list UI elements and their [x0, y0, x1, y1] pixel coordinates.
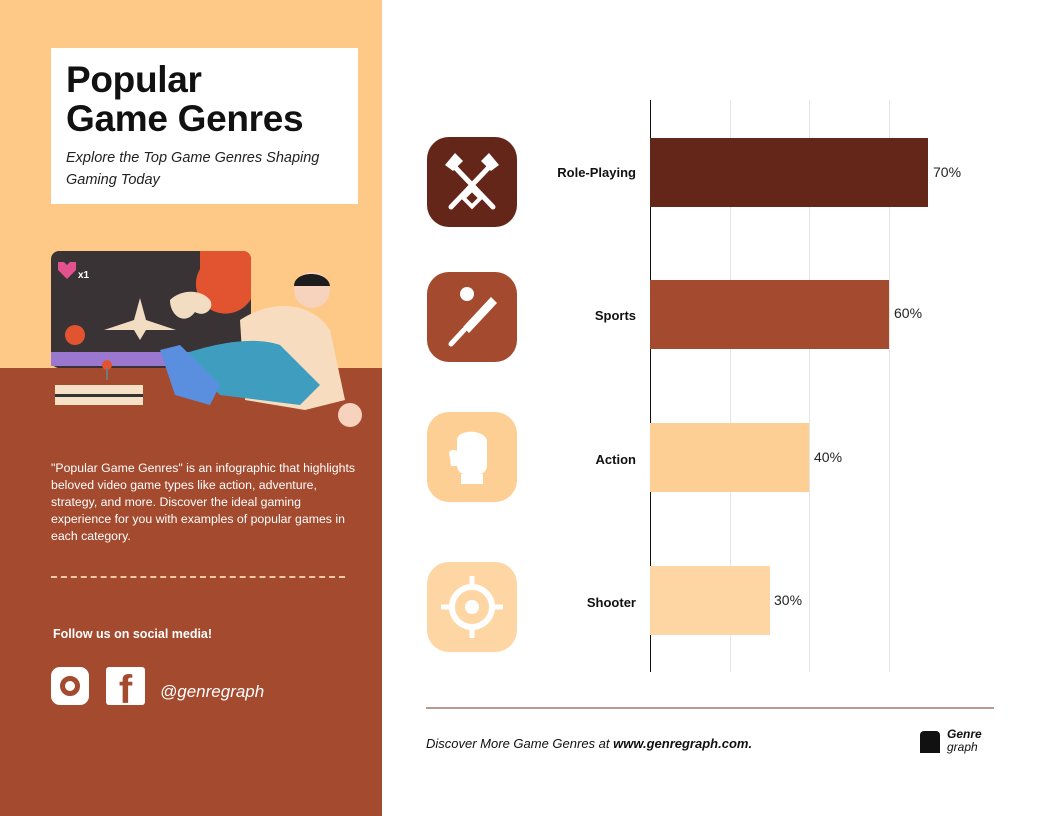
left panel: [0, 0, 382, 816]
illustration: gamer: [51, 251, 362, 427]
icon: boxing glove: [427, 412, 517, 502]
handle: @genregraph: [160, 682, 264, 701]
row: Shooter: [427, 562, 802, 652]
description: "Popular Game Genres" is an infographic that highlights beloved video game types like action, adventure, strategy, and more. Discover the ideal gaming experience for you with examples of popular games in each category.: [51, 461, 355, 543]
title card: [51, 48, 358, 204]
logo: Genre: [947, 727, 982, 741]
title: Game Genres: [66, 98, 303, 139]
logo: graph: [947, 740, 978, 754]
row: Sports: [427, 272, 922, 362]
title: Popular: [66, 59, 202, 100]
chart: [427, 100, 961, 672]
illustration: gamer: x1: [78, 270, 90, 281]
icon: crosshair: [427, 562, 517, 652]
row: Action: [427, 412, 842, 502]
title: [66, 59, 303, 139]
row: Shooter: Shooter: [587, 595, 636, 610]
row: Role-Playing: [427, 137, 961, 227]
row: Sports: Sports: [595, 308, 636, 323]
icon: instagram: [51, 667, 89, 705]
logo: [920, 727, 982, 754]
row: Action: Action: [596, 452, 636, 467]
social heading: Follow us on social media!: [53, 627, 212, 641]
row: Shooter: 30%: [774, 592, 802, 608]
row: Role-Playing: Role-Playing: [557, 165, 636, 180]
footer text: Discover More Game Genres at www.genregraph.com.: [426, 736, 752, 751]
icon: facebook: [106, 667, 145, 705]
row: Sports: 60%: [894, 305, 922, 321]
icon: cricket bat: [427, 272, 517, 362]
row: Role-Playing: 70%: [933, 164, 961, 180]
row: Action: 40%: [814, 449, 842, 465]
subtitle: Explore the Top Game Genres Shaping Gaming Today: [66, 150, 319, 188]
icon: axes: [427, 137, 517, 227]
